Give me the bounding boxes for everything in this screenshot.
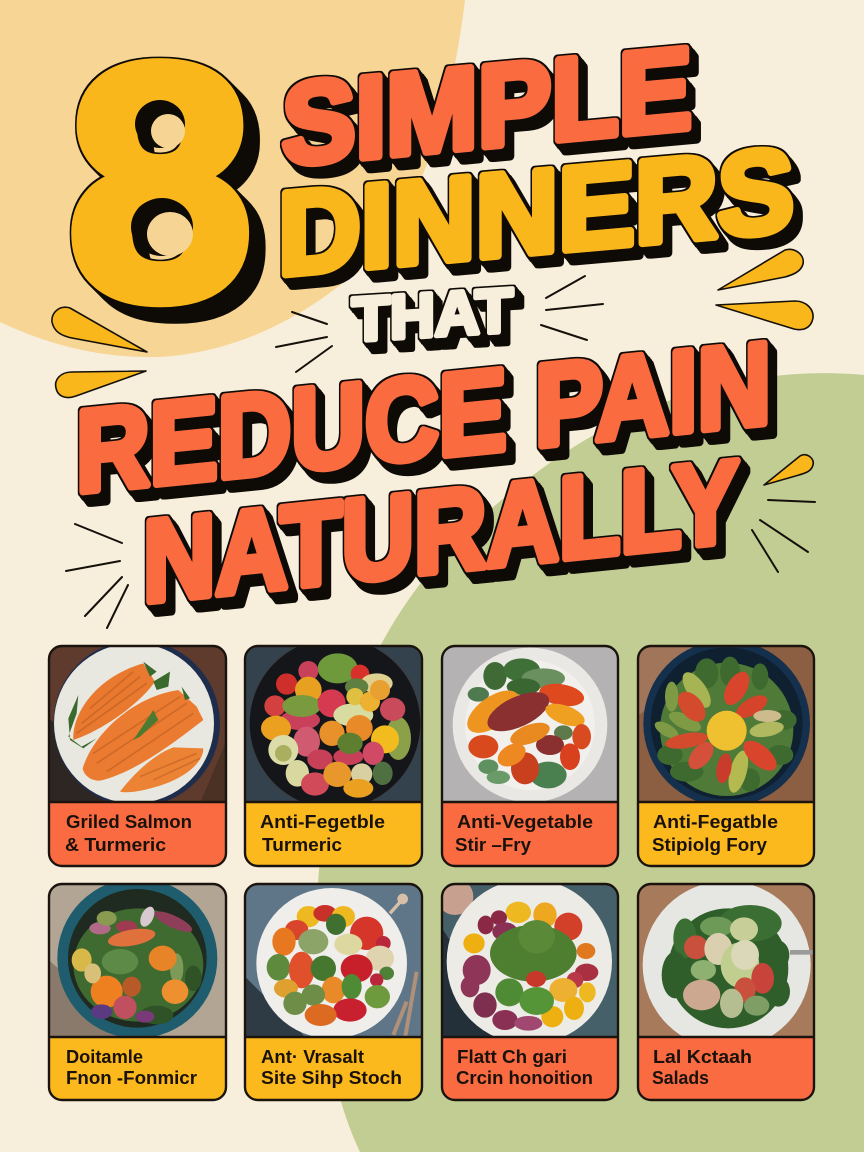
dish photo: teal salad bowl [47,878,227,1038]
label text: Stir –Fry [455,834,532,855]
card: Griled Salmon & Turmeric [47,640,227,866]
label band [245,802,422,866]
card: Flatt Ch gari Crcin honoition [437,878,620,1100]
title: DINNERS: DINNERS [278,124,794,301]
card: Ant- Vrasalt Site Sihp Stoch [243,882,423,1100]
label band [245,1037,422,1100]
card: Anti-Vegetable Stir-Fry [440,643,620,866]
dish photo: radial vegetable bowl [639,647,813,801]
card border [49,884,226,1100]
label band [442,802,618,866]
label text [455,811,593,855]
dish photo: grilled salmon [50,647,225,801]
decorative yellow sparks [52,249,813,485]
card border [49,646,226,866]
label text: Crcin honoition [456,1067,593,1088]
title: THAT: THAT [352,276,513,355]
card border [638,646,814,866]
title: REDUCE PAIN: REDUCE PAIN [76,318,771,517]
label text: Griled Salmon [66,811,192,832]
label text: Site Sihp Stoch [261,1067,402,1088]
number 8: 8 [68,0,252,368]
dish photo: stir-fry plate [440,643,620,803]
label text: Ant· Vrasalt [261,1046,364,1067]
label text: Stipiolg Fory [652,834,768,855]
green background blob [317,373,864,1152]
label text: Flatt Ch gari [457,1046,567,1067]
label text [66,1046,197,1088]
label text: Anti-Vegetable [457,811,593,832]
dish photo: leafy salad plate [639,885,813,1036]
label text: Turmeric [262,834,342,855]
card: Anti-Fegetble Turmeric [243,637,423,866]
label text: Lal Kctaah [653,1046,752,1067]
label text [260,811,385,855]
card border [442,646,618,866]
card: Lal Kctaah Salads [637,881,817,1100]
title: NATURALLY: NATURALLY [143,436,739,627]
card border [638,884,814,1100]
card border [245,884,422,1100]
card border [245,646,422,866]
label text: Anti-Fegatble [653,811,778,832]
label text [652,811,778,855]
label band [49,1037,226,1100]
peach background blob [0,0,465,357]
label band [638,1037,814,1100]
label text: & Turmeric [65,834,166,855]
label text [456,1046,593,1088]
label text [65,811,192,855]
card: Anti-Fegatble Stipiolg Fory [637,640,817,866]
label text: Salads [652,1067,709,1088]
card: Doitamle Fnon-Fonmicr [47,878,227,1100]
dish photo: green and purple plate [443,885,617,1036]
card border [442,884,618,1100]
label band [442,1037,618,1100]
dish photo: white bowl of vegetables [243,882,423,1039]
label text: Anti-Fegetble [260,811,385,832]
label text: Fnon -Fonmicr [66,1067,197,1088]
label text [261,1046,402,1088]
title: SIMPLE: SIMPLE [282,23,692,190]
label text [652,1046,752,1088]
label band [638,802,814,866]
label band [49,802,226,866]
label text: Doitamle [66,1046,143,1067]
decorative burst lines [66,276,815,628]
dish photo: vegetable bowl [246,647,421,801]
